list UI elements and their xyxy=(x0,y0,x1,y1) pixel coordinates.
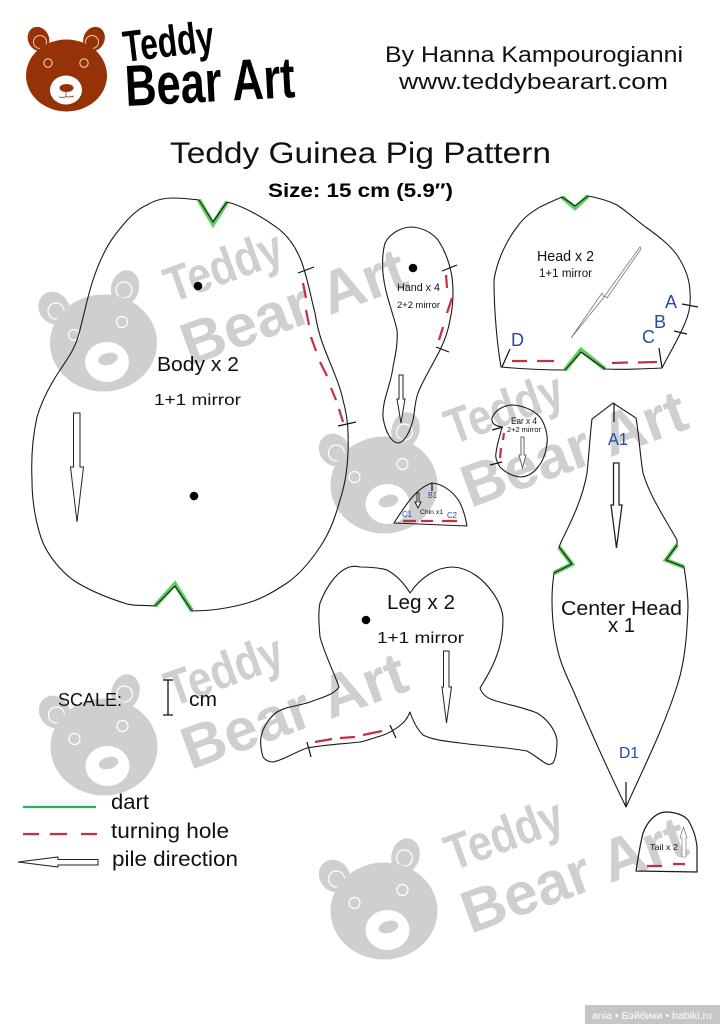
watermark: top left: Bear Art xyxy=(172,235,415,378)
pattern piece: chin: B1 xyxy=(428,490,437,500)
pattern piece: chin xyxy=(394,483,467,526)
pattern piece: tail xyxy=(636,812,697,872)
legend: dart xyxy=(23,791,149,814)
pattern piece: tail: Tail x 2 xyxy=(650,842,678,852)
pattern piece: center head xyxy=(552,403,688,807)
pattern piece: chin: Chin x1 xyxy=(420,509,443,516)
legend: dart: dart xyxy=(111,791,149,814)
legend: pile direction: pile direction xyxy=(112,848,238,871)
scale marker xyxy=(58,680,217,715)
pattern piece: hand: 2+2 mirror xyxy=(397,300,440,311)
pattern piece: center head: x 1 xyxy=(608,615,635,637)
source credit bar xyxy=(585,1005,720,1024)
author credit: www.teddybearart.com xyxy=(398,69,668,94)
legend: turning hole: turning hole xyxy=(111,820,229,843)
pattern piece: center head: Center Head xyxy=(561,598,682,620)
pattern piece: head xyxy=(494,196,698,370)
logo: bear head xyxy=(24,23,109,112)
pattern piece: body: Body x 2 xyxy=(157,354,239,376)
pattern piece: ear: 2+2 mirror xyxy=(507,425,541,434)
subtitle: size: Size: 15 cm (5.9″) xyxy=(268,180,453,202)
source credit bar: ania • Бэйбики • babiki.ru xyxy=(592,1010,712,1022)
scale marker: cm xyxy=(189,689,217,711)
pattern piece: chin: C2 xyxy=(447,510,457,520)
pattern piece: head: D xyxy=(511,330,524,350)
pattern piece: ear xyxy=(490,405,547,477)
watermark: lower right: Teddy xyxy=(437,787,571,881)
pattern piece: hand: Hand x 4 xyxy=(397,282,440,294)
watermark: lower right: Bear Art xyxy=(452,803,696,946)
author credit: By Hanna Kampourogianni xyxy=(385,42,683,67)
legend: pile direction xyxy=(18,848,238,871)
watermark: center right: Teddy xyxy=(437,361,571,455)
pattern piece: body: 1+1 mirror xyxy=(154,392,241,409)
logo: wordmark: Bear Art xyxy=(123,45,296,119)
pattern piece: ear: Ear x 4 xyxy=(511,416,537,426)
pattern piece: chin: C1 xyxy=(402,509,412,519)
scale marker: SCALE: xyxy=(58,689,122,710)
pattern piece: head: Head x 2 xyxy=(537,249,594,265)
pattern piece: leg: 1+1 mirror xyxy=(377,630,465,647)
pattern piece: head: A xyxy=(665,292,677,312)
pattern piece: hand xyxy=(383,227,457,443)
pattern piece: center head: D1 xyxy=(619,745,639,762)
logo: wordmark: Teddy xyxy=(120,12,217,72)
pattern piece: head: B xyxy=(654,312,666,332)
pattern piece: head: 1+1 mirror xyxy=(539,268,592,280)
pattern piece: center head: A1 xyxy=(608,429,628,449)
watermark: lower left: Bear Art xyxy=(172,639,416,782)
watermark: lower left: Teddy xyxy=(157,623,291,717)
author credit xyxy=(385,42,683,94)
pattern piece: leg xyxy=(261,566,557,764)
pattern piece: head: C xyxy=(642,327,655,347)
watermark: top left: Teddy xyxy=(157,219,291,313)
pattern piece: leg: Leg x 2 xyxy=(387,592,455,614)
logo: wordmark xyxy=(120,12,296,119)
watermark: center right: Bear Art xyxy=(452,377,696,520)
watermark: lower right xyxy=(312,787,696,960)
title: Teddy Guinea Pig Pattern xyxy=(170,137,551,170)
watermark: top left xyxy=(32,219,415,392)
watermark: lower left xyxy=(32,623,416,796)
pattern piece: body xyxy=(32,198,356,611)
watermark: center right xyxy=(312,361,696,534)
